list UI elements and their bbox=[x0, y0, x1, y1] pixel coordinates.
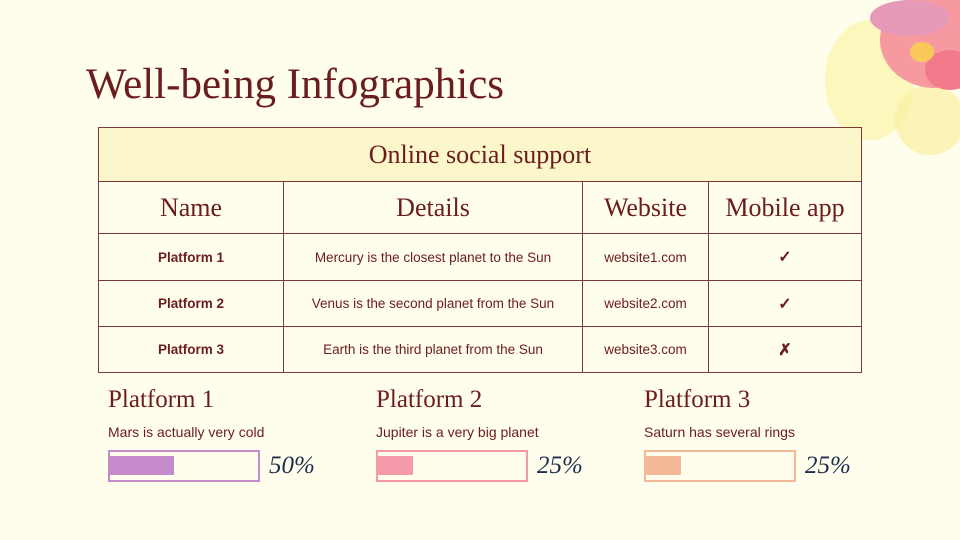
decoration: flower bbox=[825, 0, 960, 155]
platform 3: Saturn has several rings bbox=[644, 424, 795, 440]
table: Name bbox=[160, 192, 222, 222]
table: website3.com bbox=[604, 342, 687, 357]
table bbox=[98, 127, 862, 373]
table: Venus is the second planet from the Sun bbox=[312, 296, 554, 311]
platform 2: 25% bbox=[537, 452, 583, 479]
table: ✗ bbox=[778, 342, 792, 358]
table: Mercury is the closest planet to the Sun bbox=[315, 250, 551, 264]
platform 1: Mars is actually very cold bbox=[108, 424, 264, 440]
platform 1: 50% bbox=[269, 452, 315, 479]
table: Earth is the third planet from the Sun bbox=[323, 342, 543, 357]
table: Mobile app bbox=[725, 192, 845, 222]
platform 2: Platform 2 bbox=[376, 386, 482, 413]
table: Platform 1 bbox=[158, 250, 224, 264]
table: website2.com bbox=[604, 296, 687, 311]
table: Website bbox=[604, 192, 687, 222]
table: ✓ bbox=[778, 249, 792, 266]
platform 1 bbox=[108, 386, 315, 482]
title: Well-being Infographics bbox=[86, 61, 504, 108]
table: ✓ bbox=[778, 296, 792, 312]
table: Platform 2 bbox=[158, 296, 224, 311]
platform 1: Platform 1 bbox=[108, 386, 214, 413]
platform 3: Platform 3 bbox=[644, 386, 750, 413]
platform 2: Jupiter is a very big planet bbox=[376, 424, 539, 440]
table: Online social support bbox=[369, 140, 591, 168]
platform 3 bbox=[644, 386, 851, 482]
platform 2 bbox=[376, 386, 583, 482]
table: Platform 3 bbox=[158, 342, 224, 357]
table: Details bbox=[396, 192, 470, 222]
table: website1.com bbox=[604, 250, 687, 264]
platform 3: 25% bbox=[805, 452, 851, 479]
